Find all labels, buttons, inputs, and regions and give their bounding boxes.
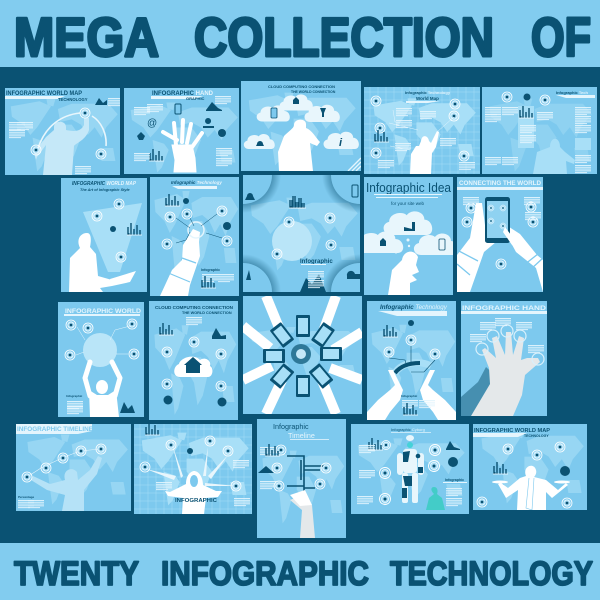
corner shadows — [205, 137, 281, 213]
header band — [0, 0, 600, 67]
panel: infographic timeline hand — [257, 419, 346, 538]
panel: cloud computing connection: CLOUD COMPUTING CONNECTION — [268, 84, 335, 89]
panel: technology hands arc — [367, 301, 456, 420]
presenter — [533, 139, 575, 174]
central cloud with house — [174, 357, 212, 377]
cyborg — [397, 435, 424, 503]
panel: technology world map grid: Infographic Technology — [405, 90, 451, 95]
panel: infographic timeline man: INFOGRAPHIC TIMELINE — [17, 426, 94, 433]
panel: infographic hand gray — [461, 301, 547, 416]
panel: world map technology presenter: TECHNOLOGY — [58, 97, 88, 102]
arc — [38, 113, 106, 148]
panel: infographic hood man — [134, 424, 252, 514]
hand pointing — [160, 229, 200, 296]
panel: infographic hand graphic — [124, 88, 239, 174]
panel: technology world map grid: World Map — [416, 96, 439, 101]
panel: infographic corners and globe — [243, 175, 360, 292]
panel: world map tablet: INFOGRAPHIC WORLD MAP — [72, 181, 136, 187]
panel: world map technology man: TECHNOLOGY — [524, 434, 549, 438]
panel: technology presenter layout: Infographic Tech — [556, 90, 588, 95]
small chart block — [9, 122, 25, 130]
panel: infographic world globe: Infographic — [66, 394, 83, 398]
panel: technology touch: Infographic Technology — [171, 180, 222, 185]
heading: Infographic Idea — [366, 180, 452, 195]
thinker — [388, 252, 419, 295]
smartphone — [485, 197, 510, 243]
thought clouds — [355, 232, 403, 253]
panel: infographic timeline hand: Timeline — [288, 431, 315, 440]
panel: infographic hand graphic: GRAPHIC — [186, 96, 205, 101]
panel: technology touch: Infographic — [201, 268, 220, 272]
panel: cloud computing house: CLOUD COMPUTING CONNECTION — [155, 305, 233, 310]
panel: hands holding phones — [243, 296, 362, 414]
panel: infographic timeline man: Percentage — [18, 495, 35, 499]
panel: infographic hand graphic: INFOGRAPHIC HAND — [152, 91, 214, 97]
arms — [243, 296, 362, 414]
panel: technology touch — [150, 177, 239, 296]
beams — [146, 444, 236, 486]
panel: infographic idea: for your site web — [391, 201, 425, 206]
panel: cloud computing house: THE WORLD CONNECTION — [182, 311, 232, 315]
hands — [367, 370, 403, 420]
man — [31, 456, 102, 511]
panel: world map tablet: The Art of Infographic Style — [80, 188, 130, 192]
panel: technology hands arc: Infographic — [401, 394, 418, 398]
arrows — [287, 456, 327, 497]
corner stripes — [348, 158, 361, 171]
panel: infographic idea — [364, 177, 453, 295]
panel: infographic cyborg — [351, 424, 469, 514]
panel: infographic cyborg: Infographic — [445, 478, 464, 482]
shadow — [461, 367, 500, 416]
center globe — [291, 344, 311, 364]
projection beam — [83, 203, 142, 272]
panel: cloud computing connection: THE WORLD CONNECTION — [291, 90, 336, 94]
panel: cloud computing house — [149, 301, 238, 420]
panel: infographic timeline man — [16, 424, 131, 511]
hooded man — [165, 471, 222, 514]
panel: cloud computing connection: i — [339, 137, 343, 149]
globe — [272, 221, 312, 261]
hand — [290, 495, 315, 538]
panel: technology hands arc: Infographic Technology — [380, 304, 448, 311]
panel: infographic corners and globe: Infographic — [300, 259, 333, 265]
panel: world map technology man — [473, 424, 587, 510]
presenter — [410, 131, 439, 174]
hand — [163, 120, 202, 172]
panel: infographic cyborg: Infographic Cyborg — [391, 427, 425, 432]
hand — [471, 332, 540, 416]
person — [69, 233, 112, 292]
globe — [83, 333, 117, 367]
panel: technology world map grid — [364, 87, 480, 174]
panel: infographic world globe — [58, 302, 144, 417]
man raising globe — [85, 362, 120, 417]
panel: world map technology man: INFOGRAPHIC WORLD MAP — [474, 428, 551, 434]
footer heading: TWENTY — [14, 555, 139, 593]
title — [14, 6, 591, 68]
title: MEGA — [14, 6, 159, 68]
heading: INFOGRAPHIC WORLD MAP — [6, 90, 82, 97]
heading: Infographic — [273, 422, 309, 431]
footer heading: INFOGRAPHIC — [161, 555, 369, 593]
title: COLLECTION — [194, 6, 494, 68]
small cyborg bust — [426, 487, 445, 510]
hands — [457, 203, 496, 292]
panel: technology presenter layout — [482, 87, 597, 174]
panel: world map technology presenter — [5, 88, 120, 175]
panel: cloud computing connection — [241, 81, 361, 171]
footer heading — [14, 555, 593, 593]
icons: @ — [147, 118, 157, 129]
heading: INFOGRAPHIC HAND — [462, 305, 546, 312]
arc — [395, 363, 431, 373]
presenter silhouette — [34, 118, 89, 175]
phones — [263, 315, 342, 397]
panel: connecting the world — [457, 177, 543, 292]
footer band — [0, 543, 600, 600]
heading: CONNECTING THE WORLD — [459, 181, 542, 187]
man — [498, 466, 568, 510]
heading: INFOGRAPHIC WORLD — [65, 308, 141, 315]
presenter — [278, 120, 320, 171]
panel: infographic hood man: INFOGRAPHIC — [175, 498, 217, 504]
panel: world map tablet — [61, 178, 147, 292]
clouds — [257, 105, 290, 122]
